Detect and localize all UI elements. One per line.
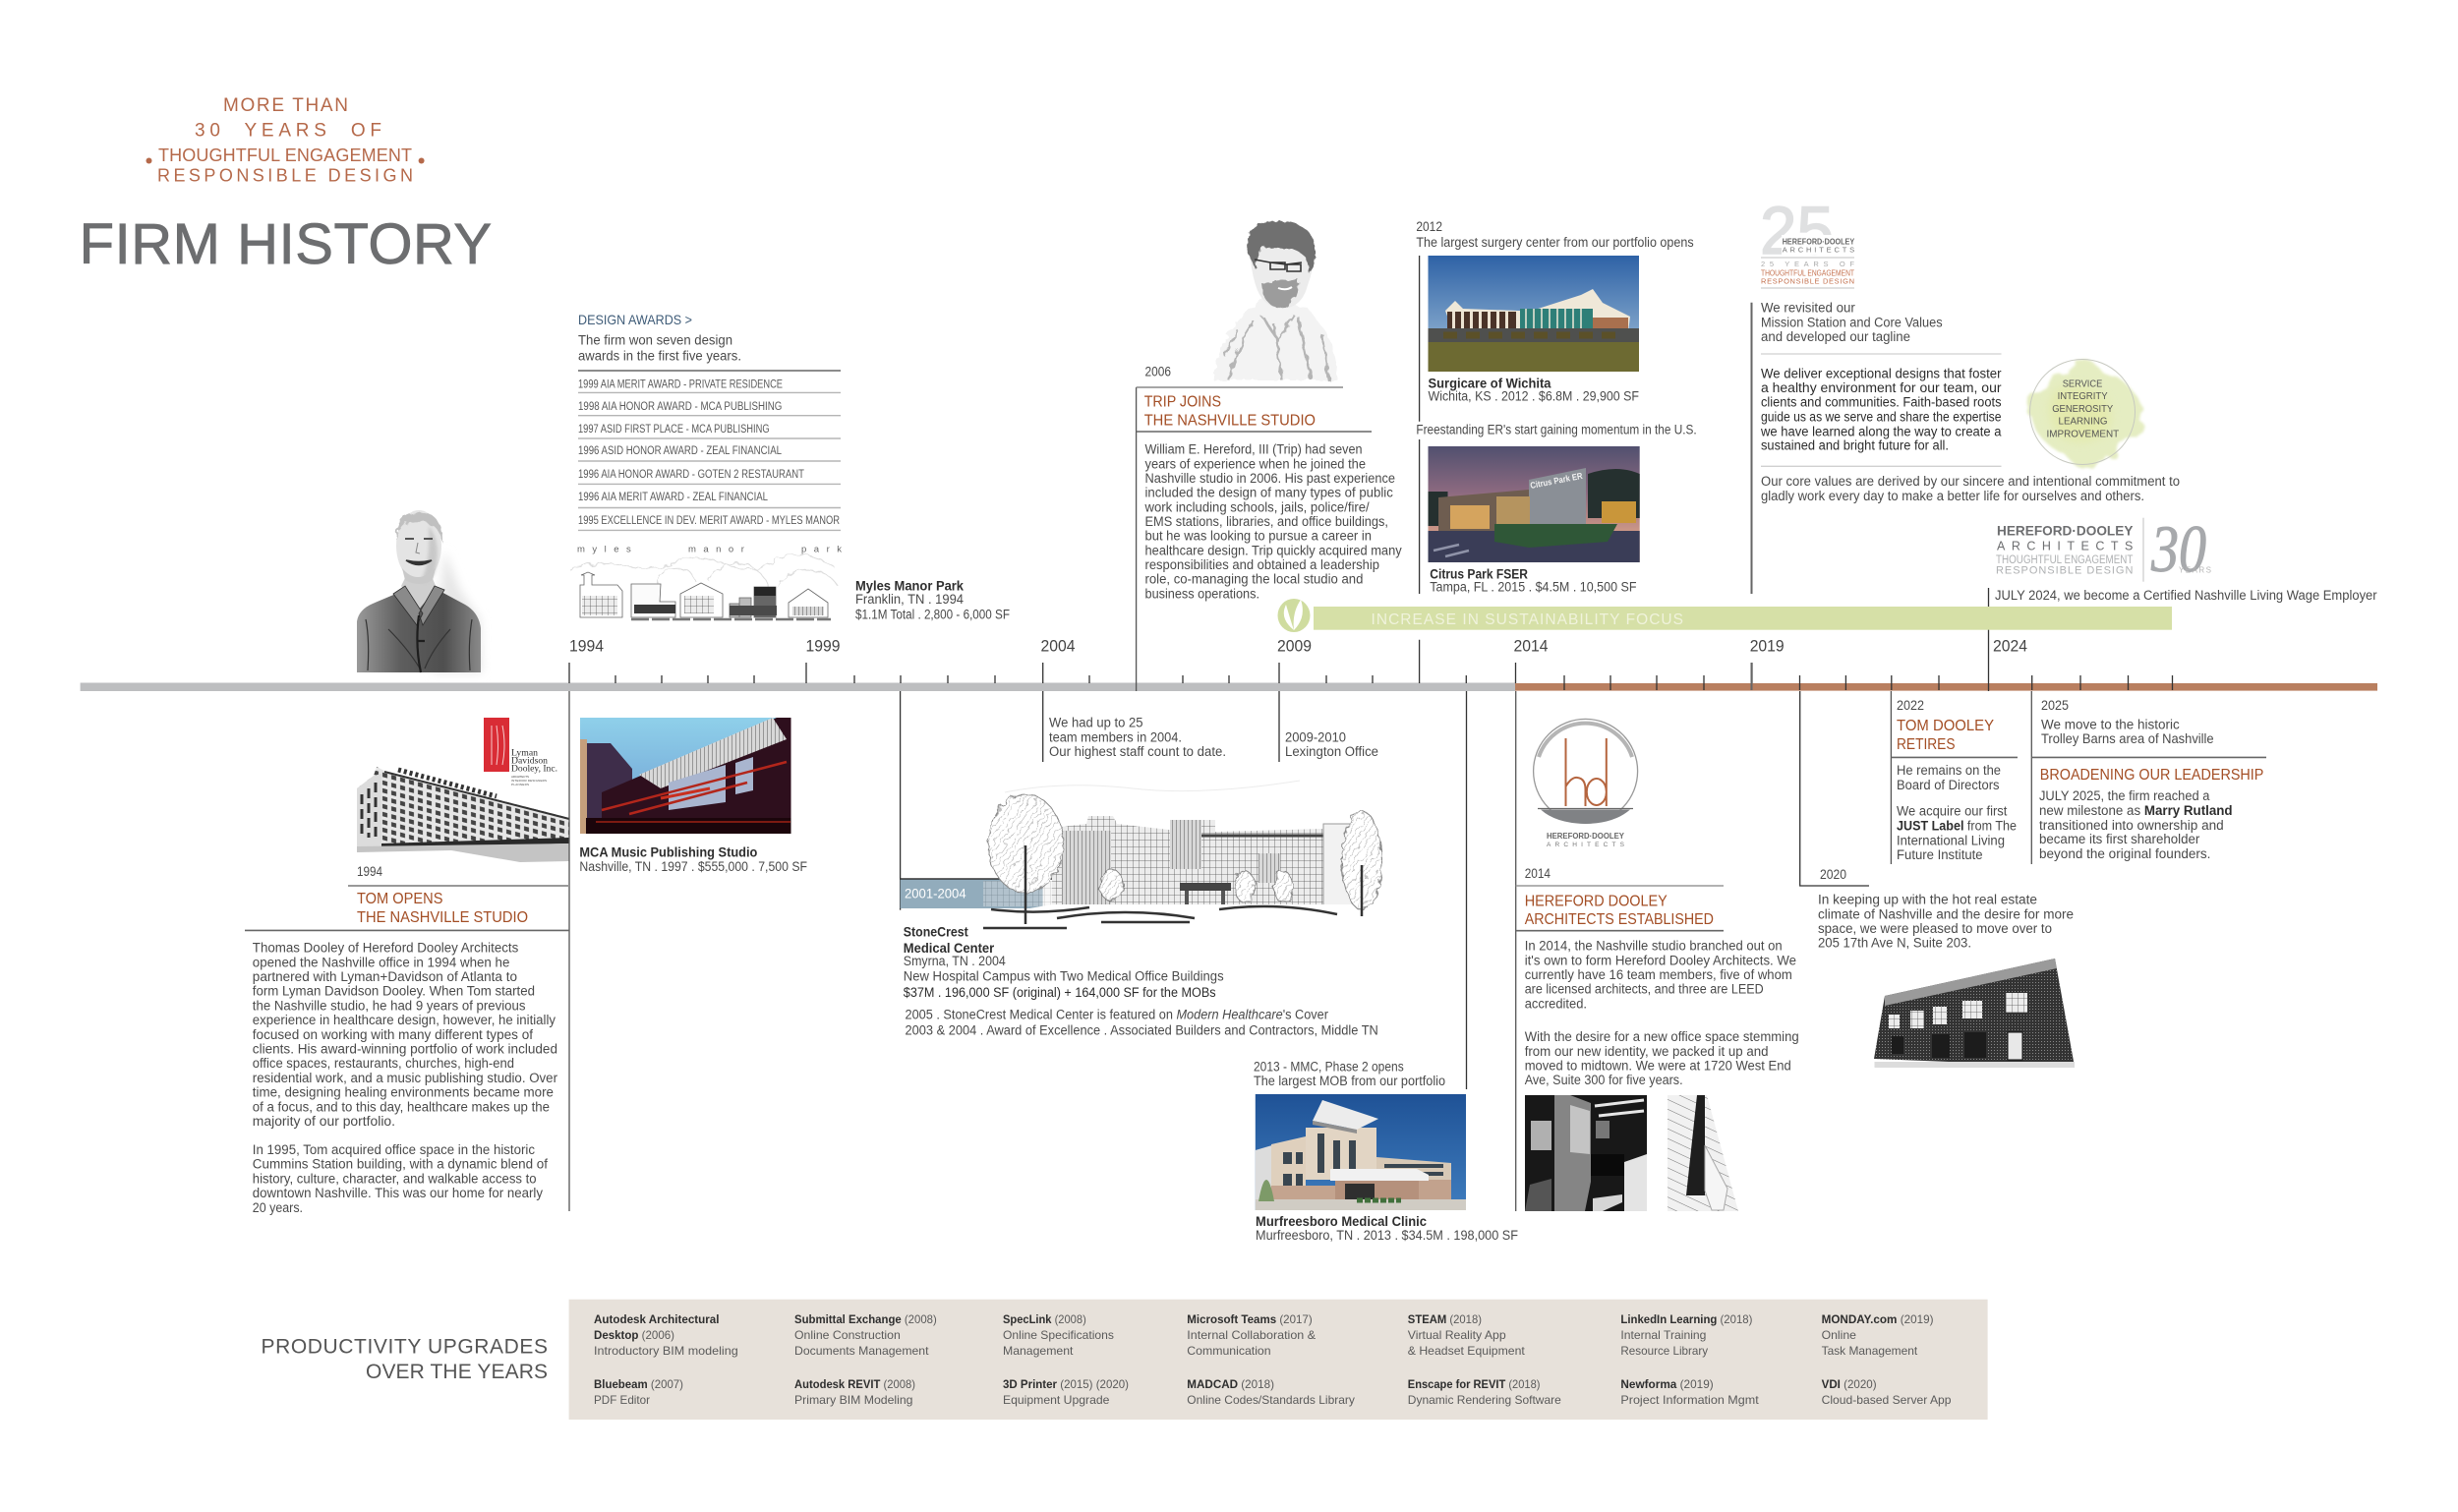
panel: Hereford Dooley Architects established: currently have 16 team members, five of whom <box>1525 967 1792 982</box>
text: StoneCrest Medical Center: New Hospital Campus with Two Medical Office Buildings <box>904 969 1224 984</box>
panel: Tom opens the Nashville studio: Thomas Dooley of Hereford Dooley Architects <box>253 941 519 956</box>
text: MCA project caption: MCA Music Publishing Studio <box>579 844 757 859</box>
panel: design awards: 1998 AIA HONOR AWARD - MCA PUBLISHING <box>578 401 782 413</box>
badge: core values watercolor: GENEROSITY <box>2052 403 2113 415</box>
panel: Tom opens the Nashville studio: majority of our portfolio. <box>253 1114 395 1129</box>
logo: Hereford Dooley hd: HEREFORD·DOOLEY <box>1547 832 1625 841</box>
illustration: Cummins Station sketch <box>357 767 569 862</box>
illustration: StoneCrest Medical Center sketch <box>968 781 1381 931</box>
text: Surgicare caption: Surgicare of Wichita <box>1428 376 1551 390</box>
sustainability bar: INCREASE IN SUSTAINABILITY FOCUS <box>1371 611 1683 628</box>
panel: mission and core values: We revisited our <box>1761 301 1855 316</box>
logo: 30 years: RESPONSIBLE DESIGN <box>1996 565 2133 577</box>
panel: productivity upgrades list: Communication <box>1187 1344 1271 1358</box>
panel: 2020 move: space, we were pleased to move over to <box>1818 921 2052 936</box>
illustration: Lyman Davidson Dooley logo: Lyman <box>511 749 538 759</box>
panel: design awards: DESIGN AWARDS > <box>578 312 692 327</box>
tagline: RESPONSIBLE DESIGN <box>157 165 413 185</box>
panel: productivity upgrades list: Submittal Exchange (2008) <box>794 1312 937 1326</box>
text: MMC Phase 2: 2013 - MMC, Phase 2 opens <box>1254 1060 1404 1074</box>
panel: Tom opens the Nashville studio: time, designing healing environments became more <box>253 1085 554 1100</box>
panel: broadening our leadership: BROADENING OUR LEADERSHIP <box>2040 767 2263 784</box>
text: staff count callout: team members in 2004. <box>1049 729 1182 745</box>
panel: productivity upgrades list: SpecLink (2008) <box>1003 1312 1086 1326</box>
text: StoneCrest Medical Center: Medical Center <box>904 941 995 956</box>
panel: Hereford Dooley Architects established: are licensed architects, and three are LEED <box>1525 982 1764 997</box>
text: Citrus Park caption: Citrus Park FSER <box>1430 566 1528 581</box>
panel: mission and core values: We deliver exceptional designs that foster <box>1761 366 2002 380</box>
year labels: 2019 <box>1750 637 1785 656</box>
text: Myles Manor Park: Franklin, TN . 1994 <box>855 592 964 607</box>
panel: broadening our leadership: transitioned into ownership and <box>2039 818 2224 833</box>
panel: Tom opens the Nashville studio: history, culture, character, and walkable access to <box>253 1172 537 1187</box>
panel: Trip joins the Nashville studio: responsibilities and obtained a leadership <box>1144 557 1379 572</box>
portrait: Tom Dooley <box>357 510 482 672</box>
panel: productivity upgrades list: Online Specifications <box>1003 1328 1114 1342</box>
panel: Tom Dooley retires: We acquire our first <box>1897 803 2008 818</box>
photo: Citrus Park FSER: Citrus Park ER <box>1529 471 1584 491</box>
panel: Trip joins the Nashville studio: William E. Hereford, III (Trip) had seven <box>1144 442 1363 457</box>
tagline: MORE THAN <box>223 95 348 116</box>
year labels: 1999 <box>806 637 840 656</box>
panel: productivity upgrades list: Dynamic Rendering Software <box>1408 1393 1561 1407</box>
logo: 30 years: HEREFORD·DOOLEY <box>1997 523 2134 539</box>
panel: mission and core values: and developed our tagline <box>1761 329 1910 344</box>
panel: Tom opens the Nashville studio: 1994 <box>357 864 382 879</box>
panel: Tom opens the Nashville studio: TOM OPENS <box>357 891 442 907</box>
panel: productivity upgrades list: Online <box>1822 1328 1856 1342</box>
panel: Tom Dooley retires: Future Institute <box>1897 847 1983 862</box>
panel: productivity upgrades list: Internal Training <box>1620 1328 1706 1342</box>
panel: Tom opens the Nashville studio: office spaces, restaurants, churches, high-end <box>253 1056 514 1071</box>
panel: Hereford Dooley Architects established: from our new identity, we packed it up and <box>1525 1044 1768 1059</box>
logo: 25 years: HEREFORD·DOOLEY <box>1783 237 1854 247</box>
panel: Trip joins the Nashville studio: Nashville studio in 2006. His past experience <box>1144 471 1395 486</box>
panel: broadening our leadership <box>2031 698 2266 861</box>
panel: Tom opens the Nashville studio: opened the Nashville office in 1994 when he <box>253 955 509 969</box>
icon: leaf <box>1278 599 1310 632</box>
text: StoneCrest Medical Center: 2003 & 2004 . Award of Excellence . Associated Builders and Contractors, Middle TN <box>905 1022 1378 1037</box>
logo: 30 years <box>1996 511 2211 586</box>
panel: productivity upgrades list: Enscape for REVIT (2018) <box>1408 1377 1540 1391</box>
panel: Trip joins the Nashville studio: role, co-managing the local studio and <box>1144 572 1363 587</box>
photo: Citrus Park FSER <box>1428 446 1640 562</box>
badge: core values watercolor: SERVICE <box>2063 378 2102 389</box>
panel: Trip joins the Nashville studio: business operations. <box>1144 586 1259 601</box>
panel: productivity upgrades list: Introductory BIM modeling <box>594 1344 738 1358</box>
panel: design awards: 1999 AIA MERIT AWARD - PRIVATE RESIDENCE <box>578 379 783 391</box>
text: 2012 surgery center: The largest surgery center from our portfolio opens <box>1416 235 1694 250</box>
panel: Hereford Dooley Architects established: moved to midtown. We were at 1720 West End <box>1525 1058 1791 1073</box>
illustration: Lyman Davidson Dooley logo: INTERIOR DESIGNERS <box>511 779 547 783</box>
panel: Tom Dooley retires: RETIRES <box>1897 736 1955 753</box>
illustration: Myles Manor Park sketch <box>568 545 842 619</box>
panel: broadening our leadership: 2025 <box>2041 698 2069 713</box>
panel: productivity upgrades list: MONDAY.com (2019) <box>1822 1312 1933 1326</box>
panel: Tom Dooley retires: Board of Directors <box>1897 778 2000 792</box>
logo: 25 years: THOUGHTFUL ENGAGEMENT <box>1761 269 1854 278</box>
panel: 2020 move: climate of Nashville and the desire for more <box>1818 906 2074 921</box>
panel: broadening our leadership: JULY 2025, the firm reached a <box>2039 788 2210 803</box>
panel: productivity upgrades list: Online Construction <box>794 1328 901 1342</box>
panel: Tom opens the Nashville studio: 20 years. <box>253 1200 303 1215</box>
photo: office interior <box>1525 1095 1647 1211</box>
text: Citrus Park caption: Tampa, FL . 2015 . $4.5M . 10,500 SF <box>1430 580 1636 595</box>
text: Surgicare caption: Wichita, KS . 2012 . $6.8M . 29,900 SF <box>1428 388 1639 403</box>
panel: Tom Dooley retires: International Living <box>1897 833 2005 847</box>
panel: productivity upgrades list: Virtual Reality App <box>1408 1328 1506 1342</box>
panel: Tom Dooley retires <box>1891 698 2018 862</box>
text: StoneCrest Medical Center: Smyrna, TN . 2004 <box>904 954 1006 968</box>
tagline: THOUGHTFUL ENGAGEMENT <box>158 145 412 165</box>
timeline ticks and connector lines <box>569 256 2173 1211</box>
logo: 30 years: YEARS <box>2179 566 2211 575</box>
panel: productivity upgrades list: PDF Editor <box>594 1393 650 1407</box>
text: MMC Phase 2 <box>1254 1060 1445 1088</box>
text: 2012 surgery center <box>1416 219 1694 250</box>
panel: 2020 move: 205 17th Ave N, Suite 203. <box>1818 936 1971 950</box>
year labels: 1994 <box>569 637 604 656</box>
text: Lexington office callout: Lexington Office <box>1285 744 1378 759</box>
heading: productivity upgrades: OVER THE YEARS <box>366 1361 548 1383</box>
panel: broadening our leadership: We move to the historic <box>2041 717 2180 731</box>
panel: design awards: The firm won seven design <box>578 332 732 347</box>
panel: productivity upgrades list: MADCAD (2018) <box>1187 1377 1274 1391</box>
panel: productivity upgrades list: Resource Library <box>1620 1344 1708 1358</box>
panel: Trip joins the Nashville studio <box>1137 365 1402 601</box>
panel: broadening our leadership: new milestone as Marry Rutland <box>2039 803 2233 818</box>
logo: 25 years: ARCHITECTS <box>1783 246 1854 255</box>
panel: productivity upgrades list: Microsoft Teams (2017) <box>1187 1312 1313 1326</box>
panel: mission and core values <box>1760 301 2180 503</box>
illustration: Lyman Davidson Dooley logo <box>484 718 557 786</box>
text: Citrus Park caption <box>1430 566 1636 595</box>
panel: mission and core values: guide us as we serve and share the expertise <box>1761 409 2002 424</box>
panel: mission and core values: Our core values are derived by our sincere and intentional commitment to <box>1761 474 2180 489</box>
panel: productivity upgrades list: LinkedIn Learning (2018) <box>1620 1312 1752 1326</box>
panel: mission and core values: sustained and bright future for all. <box>1761 438 1949 453</box>
year labels <box>569 637 2027 656</box>
year labels: 2009 <box>1277 637 1312 656</box>
logo: 30 years: THOUGHTFUL ENGAGEMENT <box>1996 554 2133 566</box>
text: Myles Manor Park <box>855 579 1010 621</box>
panel: Tom opens the Nashville studio: residential work, and a music publishing studio. Over <box>253 1071 557 1085</box>
panel: mission and core values: a healthy environment for our team, our <box>1761 380 2002 395</box>
tagline: 30 YEARS OF <box>195 121 381 142</box>
panel: productivity upgrades list <box>569 1300 1988 1420</box>
panel: design awards: 1995 EXCELLENCE IN DEV. MERIT AWARD - MYLES MANOR <box>578 515 840 527</box>
panel: productivity upgrades list: Newforma (2019) <box>1620 1377 1714 1391</box>
panel: design awards <box>578 312 841 530</box>
text: Myles Manor Park: Myles Manor Park <box>855 579 964 594</box>
heading: productivity upgrades <box>262 1336 548 1383</box>
panel: productivity upgrades list: Autodesk Architectural <box>594 1312 720 1326</box>
panel: Trip joins the Nashville studio: healthcare design. Trip quickly acquired many <box>1144 543 1402 557</box>
panel: Tom Dooley retires: TOM DOOLEY <box>1897 718 1994 734</box>
text: Murfreesboro caption: Murfreesboro, TN . 2013 . $34.5M . 198,000 SF <box>1256 1228 1518 1243</box>
text: freestanding ER note: Freestanding ER's start gaining momentum in the U.S. <box>1416 423 1697 437</box>
panel: Hereford Dooley Architects established <box>1516 866 1799 1087</box>
text: Murfreesboro caption: Murfreesboro Medical Clinic <box>1256 1214 1427 1229</box>
panel: productivity upgrades list: Autodesk REVIT (2008) <box>794 1377 915 1391</box>
photo: Murfreesboro Medical Clinic <box>1256 1094 1466 1210</box>
year labels: 2024 <box>1993 637 2027 656</box>
panel: productivity upgrades list: 3D Printer (2015) (2020) <box>1003 1377 1129 1391</box>
panel: mission and core values: clients and communities. Faith-based roots <box>1761 395 2002 410</box>
panel: Tom opens the Nashville studio: focused on working with many different types of <box>253 1027 533 1042</box>
illustration: Lyman Davidson Dooley logo: PLANNERS <box>511 783 529 786</box>
text: staff count callout <box>1049 716 1226 759</box>
illustration: Lyman Davidson Dooley logo: ARCHITECTS <box>511 775 529 779</box>
text: MCA project caption <box>579 844 807 874</box>
panel: mission and core values: Mission Station and Core Values <box>1761 315 1943 329</box>
logo: 25 years: 25 YEARS OF <box>1761 260 1854 268</box>
text: StoneCrest Medical Center: StoneCrest <box>904 925 968 940</box>
illustration: Lyman Davidson Dooley logo: Davidson <box>511 757 548 767</box>
panel: design awards: 1996 ASID HONOR AWARD - ZEAL FINANCIAL <box>578 445 783 457</box>
logo: 30 years: 30 <box>2150 511 2206 586</box>
badge: core values watercolor <box>2029 359 2141 470</box>
panel: Tom Dooley retires: JUST Label from The <box>1897 818 2017 833</box>
badge: core values watercolor: LEARNING <box>2059 416 2108 428</box>
illustration: Myles Manor Park sketch: myles manor park <box>577 545 842 555</box>
panel: 2020 move <box>1818 867 2074 950</box>
panel: Hereford Dooley Architects established: it's own to form Hereford Dooley Architects. We <box>1525 954 1796 967</box>
panel: Tom opens the Nashville studio: downtown Nashville. This was our home for nearly <box>253 1186 543 1200</box>
logo: 25 years: RESPONSIBLE DESIGN <box>1761 277 1854 286</box>
text: StoneCrest Medical Center: $37M . 196,000 SF (original) + 164,000 SF for the MOBs <box>904 985 1216 1000</box>
panel: Tom opens the Nashville studio: In 1995, Tom acquired office space in the historic <box>253 1142 535 1157</box>
panel: design awards: awards in the first five years. <box>578 348 741 363</box>
text: MMC Phase 2: The largest MOB from our portfolio <box>1254 1074 1445 1088</box>
panel: design awards: 1997 ASID FIRST PLACE - MCA PUBLISHING <box>578 424 770 436</box>
illustration: 205 17th Ave building sketch <box>1874 959 2075 1068</box>
panel: productivity upgrades list: & Headset Equipment <box>1408 1344 1525 1358</box>
photo: office sign <box>1668 1095 1738 1211</box>
panel: Trip joins the Nashville studio: 2006 <box>1144 365 1171 379</box>
panel: productivity upgrades list: Equipment Upgrade <box>1003 1393 1110 1407</box>
panel: Hereford Dooley Architects established: ARCHITECTS ESTABLISHED <box>1525 911 1714 928</box>
panel: Trip joins the Nashville studio: but he was looking to pursue a career in <box>1144 529 1372 544</box>
panel: Hereford Dooley Architects established: Ave, Suite 300 for five years. <box>1525 1073 1683 1087</box>
panel: design awards: 1996 AIA MERIT AWARD - ZEAL FINANCIAL <box>578 492 768 503</box>
logo: Hereford Dooley hd <box>1534 719 1638 848</box>
panel: Hereford Dooley Architects established: accredited. <box>1525 997 1587 1012</box>
heading: productivity upgrades: PRODUCTIVITY UPGRADES <box>262 1336 548 1359</box>
panel: design awards: 1996 AIA HONOR AWARD - GOTEN 2 RESTAURANT <box>578 469 804 481</box>
panel: productivity upgrades list: Desktop (2006) <box>594 1328 674 1342</box>
text: 2012 surgery center: 2012 <box>1416 219 1442 234</box>
text: Lexington office callout: 2009-2010 <box>1285 729 1346 745</box>
panel: Hereford Dooley Architects established: 2014 <box>1525 866 1551 881</box>
panel: Hereford Dooley Architects established: With the desire for a new office space stemming <box>1525 1029 1799 1044</box>
panel: Trip joins the Nashville studio: TRIP JOINS <box>1144 394 1221 411</box>
date tag: 2001-2004: 2001-2004 <box>905 887 966 901</box>
panel: 2020 move: In keeping up with the hot real estate <box>1818 893 2037 906</box>
text: staff count callout: We had up to 25 <box>1049 716 1142 729</box>
panel: productivity upgrades list: Project Information Mgmt <box>1620 1393 1759 1407</box>
tagline <box>146 95 425 185</box>
sustainability bar <box>1314 607 2172 630</box>
portrait: Trip Hereford <box>1213 221 1338 380</box>
panel: productivity upgrades list: Documents Management <box>794 1344 929 1358</box>
panel: productivity upgrades list: Bluebeam (2007) <box>594 1377 683 1391</box>
text: StoneCrest Medical Center: 2005 . StoneCrest Medical Center is featured on Modern Healthcare's Cover <box>905 1007 1328 1022</box>
illustration: Lyman Davidson Dooley logo: Dooley, Inc. <box>511 765 557 775</box>
panel: productivity upgrades list: Internal Collaboration & <box>1187 1328 1316 1342</box>
panel: Tom opens the Nashville studio <box>245 864 569 1215</box>
panel: Trip joins the Nashville studio: included the design of many types of public <box>1144 486 1393 500</box>
panel: productivity upgrades list: Management <box>1003 1344 1074 1358</box>
badge: core values watercolor: INTEGRITY <box>2058 390 2108 402</box>
year labels: 2004 <box>1040 637 1076 656</box>
badge: core values watercolor: IMPROVEMENT <box>2047 429 2120 440</box>
panel: Trip joins the Nashville studio: THE NASHVILLE STUDIO <box>1144 412 1316 429</box>
panel: productivity upgrades list: VDI (2020) <box>1822 1377 1877 1391</box>
date tag: 2001-2004 <box>900 879 1088 908</box>
panel: Hereford Dooley Architects established: In 2014, the Nashville studio branched out on <box>1525 939 1783 954</box>
logo: 30 years: ARCHITECTS <box>1997 539 2133 552</box>
panel: Tom opens the Nashville studio: the Nashville studio, he had 9 years of previous <box>253 998 526 1013</box>
panel: mission and core values: gladly work every day to make a better life for ourselves and others. <box>1761 489 2144 503</box>
panel: broadening our leadership: Trolley Barns area of Nashville <box>2041 731 2214 746</box>
text: Surgicare caption <box>1428 376 1639 403</box>
panel: Trip joins the Nashville studio: EMS stations, libraries, and office buildings, <box>1144 514 1388 529</box>
panel: Hereford Dooley Architects established: HEREFORD DOOLEY <box>1525 893 1668 909</box>
logo: Hereford Dooley hd: ARCHITECTS <box>1547 842 1625 848</box>
panel: Tom opens the Nashville studio: experience in healthcare design, however, he initially <box>253 1013 556 1027</box>
text: staff count callout: Our highest staff count to date. <box>1049 744 1226 759</box>
panel: productivity upgrades list: STEAM (2018) <box>1408 1312 1482 1326</box>
text: living wage note: JULY 2024, we become a Certified Nashville Living Wage Employer <box>1995 588 2377 603</box>
logo: 25 years <box>1760 193 1856 288</box>
panel: broadening our leadership: beyond the original founders. <box>2039 846 2210 861</box>
panel: Trip joins the Nashville studio: work including schools, jails, police/fire/ <box>1144 499 1370 514</box>
panel: Trip joins the Nashville studio: years of experience when he joined the <box>1144 456 1366 471</box>
text: MCA project caption: Nashville, TN . 1997 . $555,000 . 7,500 SF <box>579 859 807 874</box>
text: Myles Manor Park: $1.1M Total . 2,800 - 6,000 SF <box>855 607 1010 621</box>
year labels: 2014 <box>1514 637 1548 656</box>
title: FIRM HISTORY <box>80 212 492 276</box>
panel: Tom opens the Nashville studio: form Lyman Davidson Dooley. When Tom started <box>253 984 535 999</box>
photo: Surgicare of Wichita <box>1428 256 1639 372</box>
panel: Tom opens the Nashville studio: THE NASHVILLE STUDIO <box>357 909 528 926</box>
logo: 25 years: 25 <box>1760 193 1834 268</box>
panel: Tom opens the Nashville studio: of a focus, and to this day, healthcare makes up the <box>253 1099 550 1114</box>
panel: productivity upgrades list: Online Codes/Standards Library <box>1187 1393 1355 1407</box>
panel: productivity upgrades list: Cloud-based Server App <box>1822 1393 1952 1407</box>
panel: mission and core values: we have learned along the way to create a <box>1760 424 2002 438</box>
panel: Tom opens the Nashville studio: clients. His award-winning portfolio of work included <box>253 1042 557 1056</box>
photo: MCA Music Publishing Studio <box>580 718 790 834</box>
panel: Tom opens the Nashville studio: Cummins Station building, with a dynamic blend of <box>253 1157 548 1172</box>
panel: Tom Dooley retires: He remains on the <box>1897 763 2001 778</box>
text: Lexington office callout <box>1285 729 1378 759</box>
panel: productivity upgrades list: Primary BIM Modeling <box>794 1393 912 1407</box>
panel: Tom opens the Nashville studio: partnered with Lyman+Davidson of Atlanta to <box>253 969 517 984</box>
timeline bar <box>81 682 2377 691</box>
text: Murfreesboro caption <box>1256 1214 1518 1243</box>
panel: 2020 move: 2020 <box>1820 867 1846 882</box>
text: StoneCrest Medical Center <box>904 925 1378 1037</box>
panel: Tom Dooley retires: 2022 <box>1897 698 1924 713</box>
panel: productivity upgrades list: Task Management <box>1822 1344 1918 1358</box>
panel: broadening our leadership: became its first shareholder <box>2039 832 2200 846</box>
